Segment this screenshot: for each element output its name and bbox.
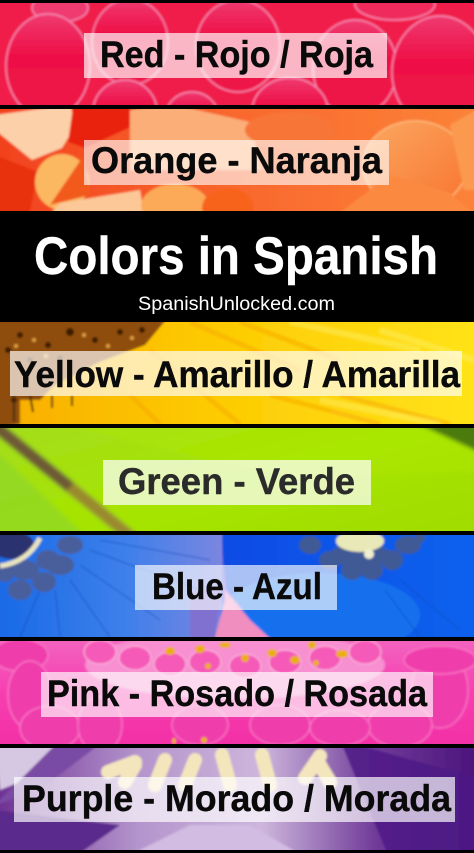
label: pink: Pink - Rosado / Rosada: [47, 673, 427, 714]
panel: pink: [0, 629, 474, 756]
label: yellow: Yellow - Amarillo / Amarilla: [14, 354, 460, 395]
label: orange: Orange - Naranja: [91, 140, 382, 181]
panel: purple: [0, 736, 474, 853]
panel: blue: [0, 523, 474, 657]
panel: yellow: [0, 310, 474, 436]
panel: green: [0, 416, 474, 543]
panel: orange: [0, 97, 474, 228]
panel: title: [0, 211, 474, 322]
label: purple: Purple - Morado / Morada: [22, 778, 451, 819]
website: SpanishUnlocked.com: [138, 294, 335, 315]
heading: Colors in Spanish: [34, 227, 438, 286]
label: blue: Blue - Azul: [152, 566, 322, 607]
label: red: Red - Rojo / Roja: [100, 34, 373, 75]
label: green: Green - Verde: [118, 461, 355, 502]
panel: red: [0, 0, 474, 146]
